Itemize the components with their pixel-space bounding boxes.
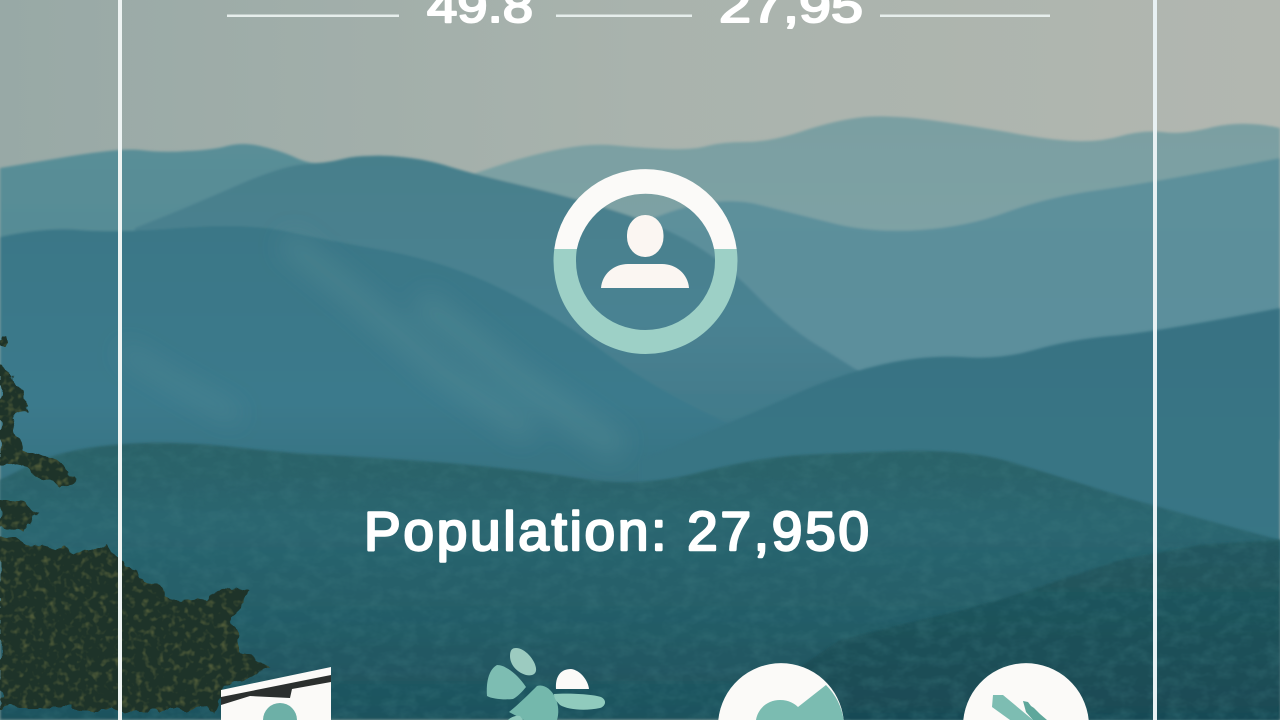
light ridge streaks — [122, 240, 620, 450]
icon: circular badge with plant — [963, 663, 1089, 720]
icon: circular badge with hand — [718, 663, 844, 720]
icon: pebbles — [487, 648, 605, 720]
frame: right vertical line — [1153, 0, 1157, 720]
tree at lower left — [0, 335, 272, 712]
heading: population: Population: 27,950 — [364, 500, 869, 562]
icon: id card — [221, 667, 331, 720]
icon: person in half-filled ring — [554, 169, 738, 354]
top stats row — [227, 0, 1050, 32]
frame: left vertical line — [118, 0, 122, 720]
